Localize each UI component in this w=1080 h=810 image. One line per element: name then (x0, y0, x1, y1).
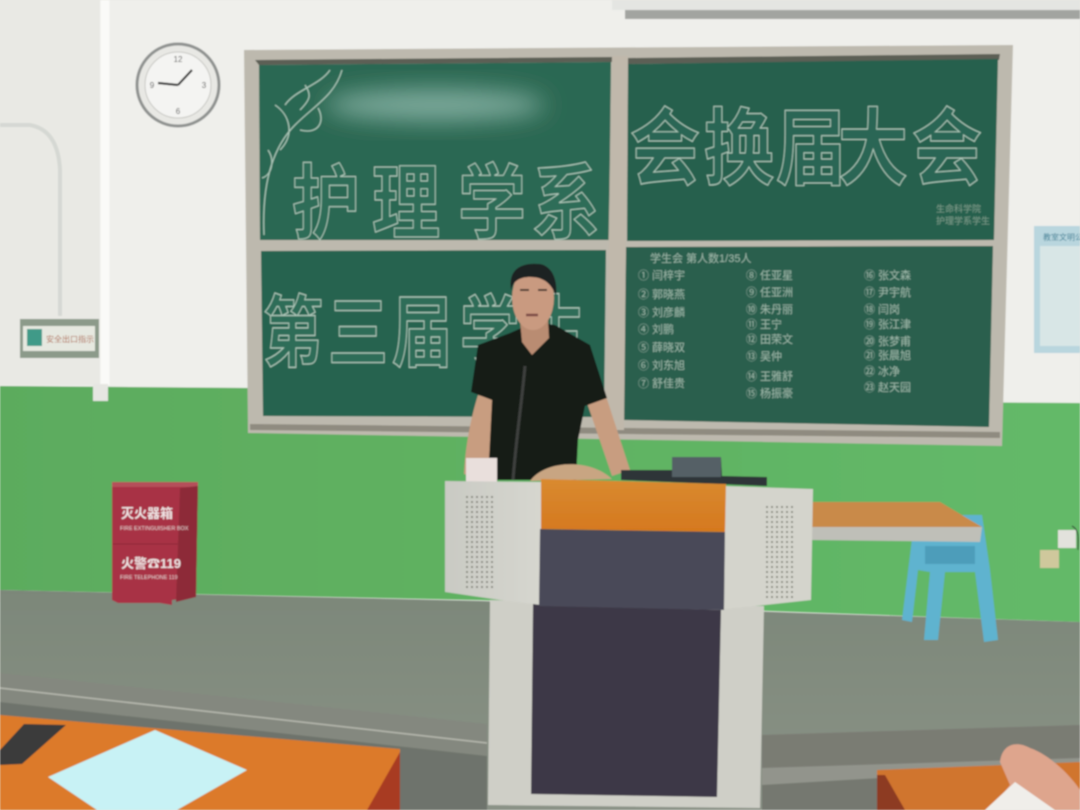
wall clock (137, 44, 219, 126)
desk bottom left (0, 715, 400, 810)
blackboard top right (627, 59, 998, 241)
blackboard bottom right: candidate list: ② 郭晓燕 (638, 288, 685, 301)
wall conduit (0, 0, 108, 401)
wall (0, 0, 1080, 410)
blackboard bottom right: candidate list: ㉒ 冰净 (864, 364, 900, 378)
blackboard top right: 生命科学院 (936, 203, 981, 214)
blackboard bottom right: candidate list: ⑦ 舒佳贵 (638, 376, 685, 390)
fire extinguisher box: 灭火器箱 (121, 506, 173, 521)
lectern: top left speaker panel (445, 481, 541, 605)
blackboard bottom right: candidate list: ⑥ 刘东旭 (638, 358, 685, 372)
blackboard bottom right: candidate list: ⑤ 薛晓双 (638, 341, 685, 354)
fire extinguisher box: 火警☎119 (121, 556, 181, 571)
wall clock: 3 (202, 81, 207, 90)
blackboard top left (259, 62, 611, 249)
wall clock: 12 (174, 55, 183, 64)
blackboard bottom right: candidate list: ⑬ 吴仲 (746, 349, 782, 363)
ceiling air conditioner (612, 0, 1080, 19)
blackboard frame (244, 45, 1013, 446)
notice board on right wall (1034, 226, 1080, 353)
wall clock: 6 (176, 107, 181, 116)
blue stool (902, 515, 998, 642)
microphone (513, 366, 525, 480)
board title: 第三届学生: 第三届学生 (263, 289, 585, 377)
podium items (466, 457, 767, 486)
audience hands (990, 744, 1080, 810)
lectern: centre navy panel (539, 529, 725, 610)
blackboard bottom right: candidate list: ⑲ 张江津 (864, 318, 911, 331)
blackboard bottom right: candidate list: ① 闫梓宇 (638, 268, 685, 282)
fire extinguisher box: FIRE EXTINGUISHER BOX (120, 526, 189, 532)
green wall band (0, 386, 1080, 622)
wall outlets (1040, 526, 1078, 568)
blackboard bottom right: candidate list (623, 246, 993, 427)
blackboard bottom right: candidate list: ⑩ 朱丹丽 (746, 303, 793, 316)
blackboard bottom right: candidate list: ⑮ 杨振豪 (746, 386, 793, 400)
board title: 护理学系: 护理学系 (292, 158, 600, 249)
phone on desk (0, 724, 66, 765)
wall clock: 9 (150, 81, 155, 90)
side table (812, 502, 982, 542)
wall sign: 安全出口指示 (46, 334, 94, 344)
speaker: hair (511, 264, 556, 296)
speaker (464, 264, 630, 482)
blackboard bottom right: candidate list: ⑰ 尹宇航 (864, 285, 911, 299)
board title: 会换届大会: 会换届大会 (630, 103, 982, 196)
blackboard bottom right: candidate list: ⑫ 田荣文 (746, 332, 793, 346)
wall sign (20, 319, 99, 358)
fire extinguisher box (112, 482, 198, 605)
paper on desk (48, 730, 247, 810)
lectern: orange wood panel (541, 479, 726, 532)
blackboard bottom right: candidate list: 学生会 第人数1/35人 (650, 251, 751, 265)
lectern: top right speaker panel (724, 486, 813, 609)
blackboard bottom left (261, 250, 606, 417)
blackboard top right: 护理学系学生 (936, 215, 990, 226)
lectern (445, 479, 813, 808)
lectern: base (488, 600, 764, 808)
blackboard bottom right: candidate list: ⑯ 张文森 (864, 268, 911, 282)
speaker: polo shirt (471, 322, 607, 480)
blackboard bottom right: candidate list: ③ 刘彦麟 (638, 305, 685, 319)
floor (0, 590, 1080, 810)
speaker: arms (464, 395, 496, 482)
blackboard bottom right: candidate list: ㉓ 赵天园 (864, 380, 911, 394)
blackboard bottom right: candidate list: ㉑ 张晨旭 (864, 348, 911, 362)
blackboard centre post (605, 56, 628, 430)
blackboard bottom right: candidate list: ⑭ 王雅舒 (746, 369, 793, 383)
blackboard bottom right: candidate list: ⑱ 闫岗 (864, 303, 900, 316)
blackboard bottom right: candidate list: ⑧ 任亚星 (746, 269, 793, 282)
blackboard bottom right: candidate list: ⑨ 任亚洲 (746, 286, 793, 299)
desk bottom right (877, 744, 1080, 810)
blackboard bottom right: candidate list: ④ 刘鹏 (638, 323, 674, 336)
speaker: neck and face (520, 320, 549, 355)
blackboard bottom right: candidate list: ⑳ 张梦甫 (864, 335, 911, 348)
blackboard bottom right: candidate list: ⑪ 王宁 (746, 317, 782, 331)
fire extinguisher box: FIRE TELEPHONE 119 (120, 575, 178, 581)
